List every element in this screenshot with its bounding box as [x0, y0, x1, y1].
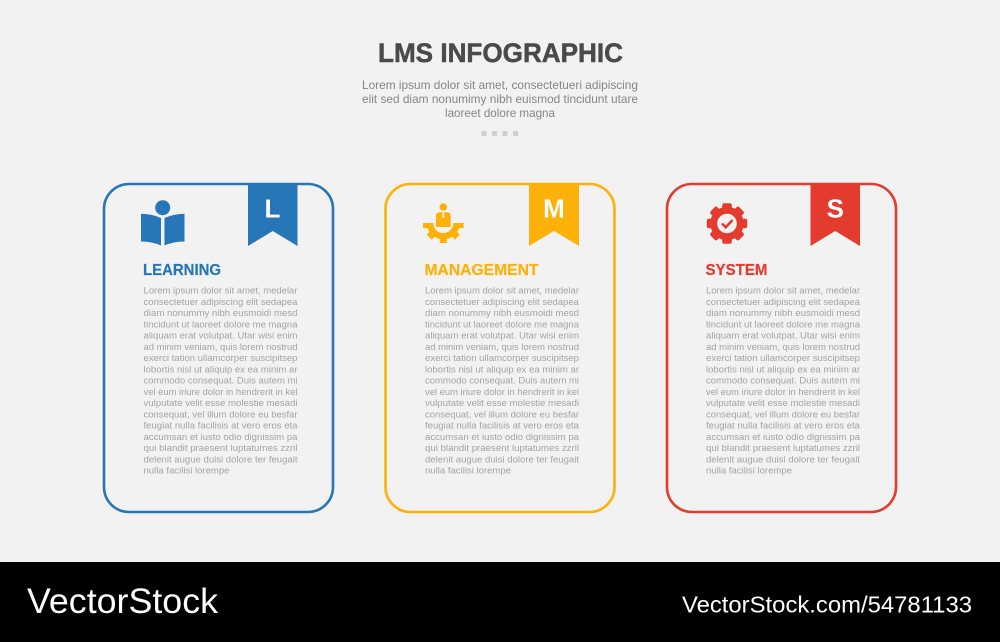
body text: tincidunt ut laoreet dolore me magna	[425, 318, 580, 329]
body text: nulla facilisi lorempe	[706, 464, 792, 476]
body text: aliquam erat volutpat. Utar wisi enim	[425, 330, 579, 340]
body text: qui blandit praesent luptatumes zzril	[144, 442, 298, 453]
body text: feugiat nulla facilisis at vero eros eta	[144, 420, 298, 430]
body text: Lorem ipsum dolor sit amet, medelar	[425, 284, 579, 296]
card outline	[104, 184, 333, 512]
body text: nulla facilisi lorempe	[144, 464, 230, 476]
body text: aliquam erat volutpat. Utar wisi enim	[706, 330, 860, 340]
body text: feugiat nulla facilisis at vero eros eta	[706, 420, 861, 430]
body text: tincidunt ut laoreet dolore me magna	[706, 318, 861, 329]
body text: vel eum iriure dolor in hendrerit in kel	[425, 386, 579, 397]
body text: diam nonummy nibh eusmoidi mesd	[425, 307, 579, 318]
body text: commodo consequat. Duis autem mi	[706, 374, 860, 386]
ribbon tag M: M	[543, 194, 565, 224]
body text: vel eum iriure dolor in hendrerit in kel	[144, 386, 298, 397]
body text: vulputate velit esse molestie mesadi	[144, 397, 298, 408]
body text: diam nonummy nibh eusmoidi mesd	[144, 307, 298, 318]
body text: tincidunt ut laoreet dolore me magna	[144, 318, 298, 329]
body text: vulputate velit esse molestie mesadi	[425, 397, 579, 408]
body text: lobortis nisl ut aliquip ex ea minim ar	[706, 363, 860, 374]
body text: consequat, vel illum dolore eu besfar	[144, 408, 298, 419]
body text: delenit augue duisi dolore ter feugait	[144, 453, 298, 464]
heading: LEARNING	[143, 262, 221, 279]
body text	[144, 284, 298, 476]
panel: learning	[104, 183, 333, 512]
footer logo: VectorStock	[27, 582, 219, 621]
subtitle text block	[362, 78, 638, 120]
dots separator	[482, 131, 518, 136]
body text: delenit augue duisi dolore ter feugait	[706, 453, 860, 464]
body text: consectetuer adipiscing elit sedapea	[706, 296, 861, 307]
heading: SYSTEM	[706, 262, 768, 279]
title: LMS INFOGRAPHIC	[378, 38, 623, 68]
card outline	[667, 184, 896, 512]
body text	[706, 284, 861, 476]
body text: feugiat nulla facilisis at vero eros eta	[425, 420, 580, 430]
footer image id: VectorStock.com/54781133	[682, 592, 972, 618]
icon: reading book	[141, 200, 184, 246]
body text: vulputate velit esse molestie mesadi	[706, 397, 860, 408]
body text: nulla facilisi lorempe	[425, 464, 511, 476]
body text: exerci tation ullamcorper suscipitsep	[706, 352, 860, 363]
body text: commodo consequat. Duis autem mi	[425, 374, 579, 386]
heading: MANAGEMENT	[424, 262, 539, 279]
body text: consequat, vel illum dolore eu besfar	[425, 408, 579, 419]
panel: system	[667, 183, 896, 512]
body text: lobortis nisl ut aliquip ex ea minim ar	[425, 363, 579, 374]
subtitle text block: laoreet dolore magna	[445, 106, 555, 120]
body text: consequat, vel illum dolore eu besfar	[706, 408, 860, 419]
ribbon tag M	[529, 183, 579, 246]
body text: accumsan et iusto odio dignissim pa	[706, 431, 861, 442]
body text: commodo consequat. Duis autem mi	[144, 374, 298, 386]
body text: ad minim veniam, quis lorem nostrud	[706, 341, 860, 352]
body text: consectetuer adipiscing elit sedapea	[425, 296, 580, 307]
icon: manager on gear	[423, 203, 464, 243]
ribbon tag L: L	[265, 194, 281, 224]
icon: gear with check	[707, 203, 747, 244]
body text: ad minim veniam, quis lorem nostrud	[425, 341, 579, 352]
body text: ad minim veniam, quis lorem nostrud	[144, 341, 298, 352]
footer bar	[0, 562, 1000, 642]
body text: qui blandit praesent luptatumes zzril	[425, 442, 579, 453]
ribbon tag L	[248, 183, 298, 246]
body text: lobortis nisl ut aliquip ex ea minim ar	[144, 363, 298, 374]
body text: vel eum iriure dolor in hendrerit in kel	[706, 386, 860, 397]
body text: exerci tation ullamcorper suscipitsep	[425, 352, 579, 363]
body text: aliquam erat volutpat. Utar wisi enim	[144, 330, 298, 340]
body text: qui blandit praesent luptatumes zzril	[706, 442, 860, 453]
ribbon tag S	[810, 183, 860, 246]
body text	[425, 284, 580, 476]
body text: Lorem ipsum dolor sit amet, medelar	[144, 284, 298, 296]
body text: Lorem ipsum dolor sit amet, medelar	[706, 284, 860, 296]
panel: management	[386, 183, 614, 512]
subtitle text block: elit sed diam nonumimy nibh euismod tincidunt utare	[362, 92, 638, 106]
body text: accumsan et iusto odio dignissim pa	[425, 431, 580, 442]
card outline	[386, 184, 614, 512]
ribbon tag S: S	[827, 194, 844, 224]
body text: consectetuer adipiscing elit sedapea	[144, 296, 298, 307]
subtitle text block: Lorem ipsum dolor sit amet, consectetueri adipiscing	[362, 78, 638, 92]
body text: exerci tation ullamcorper suscipitsep	[144, 352, 298, 363]
body text: accumsan et iusto odio dignissim pa	[144, 431, 298, 442]
body text: delenit augue duisi dolore ter feugait	[425, 453, 579, 464]
body text: diam nonummy nibh eusmoidi mesd	[706, 307, 860, 318]
